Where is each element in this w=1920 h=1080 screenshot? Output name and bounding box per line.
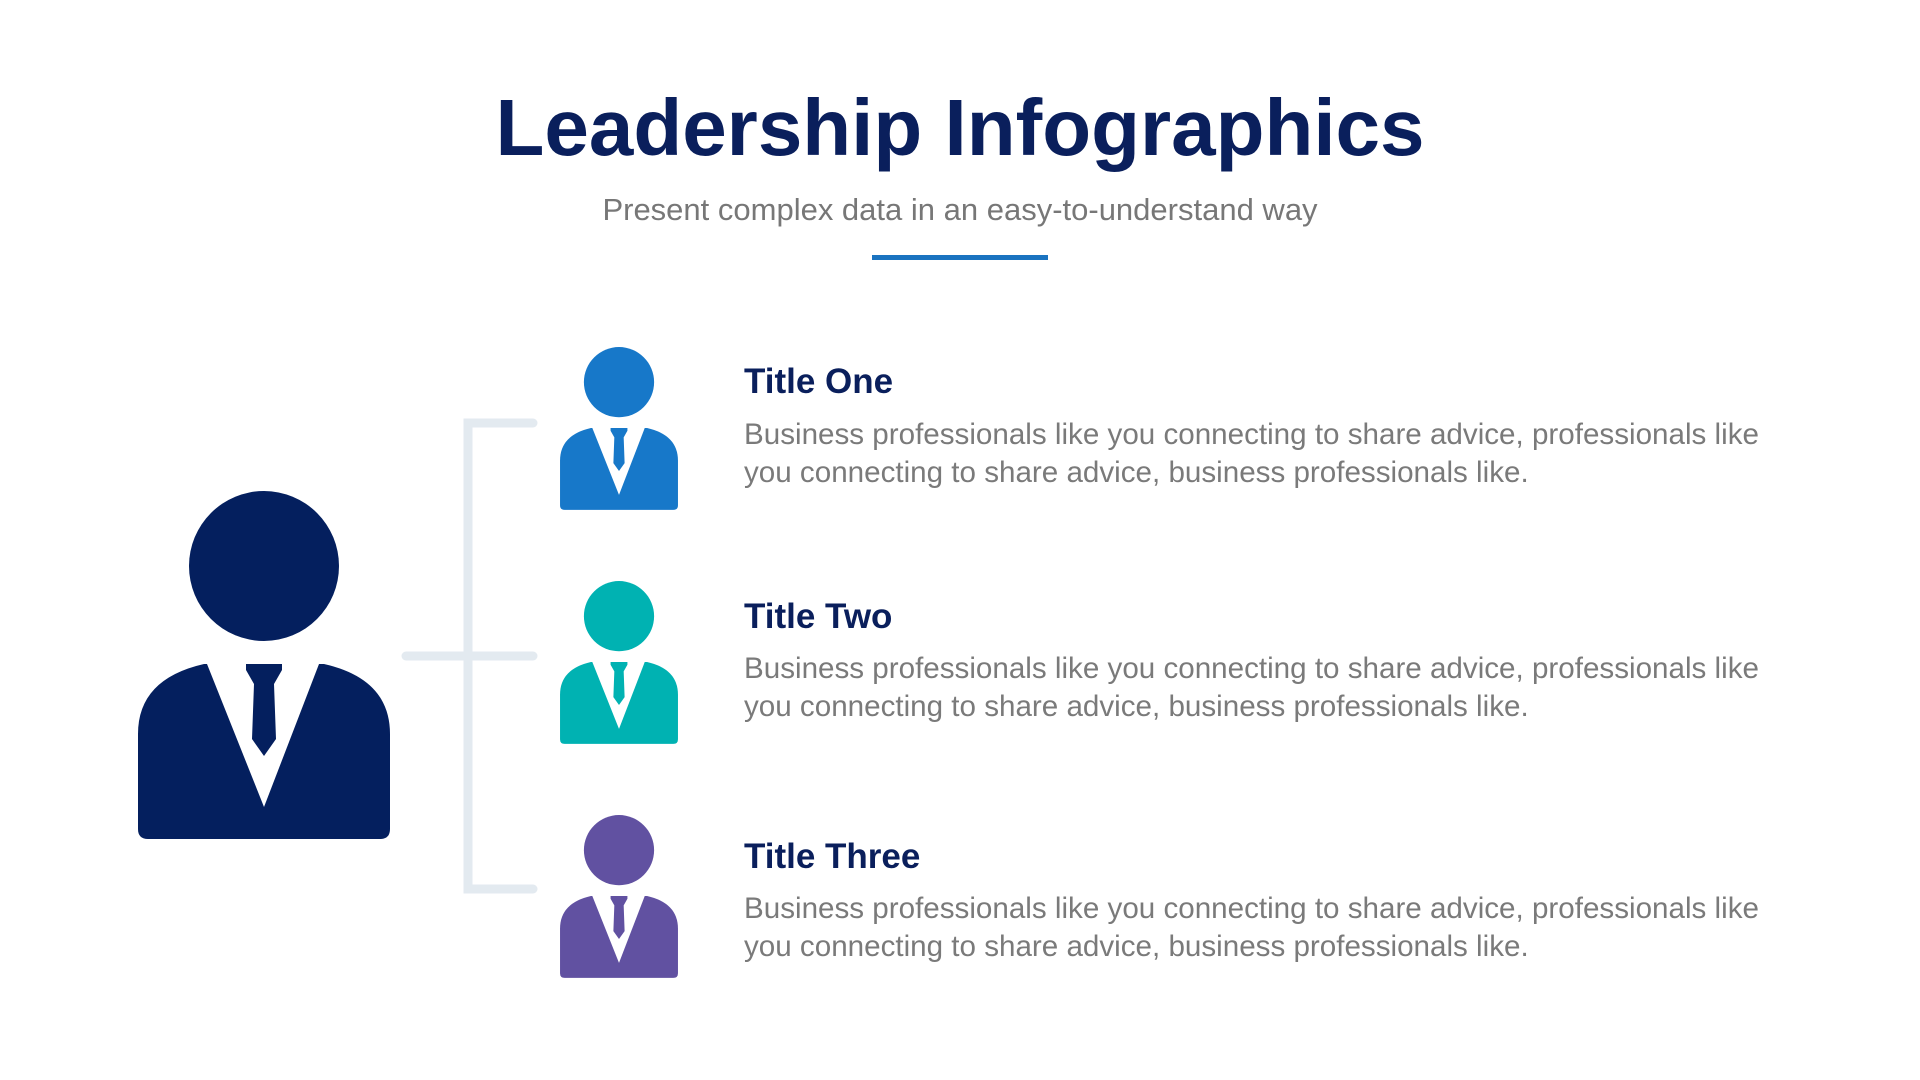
- icon: person three: [560, 815, 678, 978]
- icon: person two: [560, 581, 678, 744]
- text: body two: Business professionals like you connecting to share advice, professionals like: [744, 652, 1759, 685]
- text: body one: Business professionals like you connecting to share advice, professionals like: [744, 418, 1759, 451]
- text: body two: you connecting to share advice, business professionals like.: [744, 690, 1529, 723]
- heading: title three: Title Three: [744, 837, 920, 876]
- text: body one: you connecting to share advice, business professionals like.: [744, 456, 1529, 489]
- heading: title two: Title Two: [744, 597, 892, 636]
- title: Leadership Infographics: [495, 83, 1425, 172]
- text: body two: [744, 652, 1759, 723]
- text: body three: Business professionals like you connecting to share advice, professionals like: [744, 892, 1759, 925]
- heading: title one: Title One: [744, 362, 893, 401]
- text: body one: [744, 418, 1759, 489]
- text: body three: you connecting to share advice, business professionals like.: [744, 930, 1529, 963]
- icon: person one: [560, 347, 678, 510]
- icon: leader: [138, 491, 390, 839]
- title underline: [872, 255, 1048, 260]
- subtitle: Present complex data in an easy-to-understand way: [602, 192, 1318, 227]
- connector bracket: [406, 423, 533, 889]
- text: body three: [744, 892, 1759, 963]
